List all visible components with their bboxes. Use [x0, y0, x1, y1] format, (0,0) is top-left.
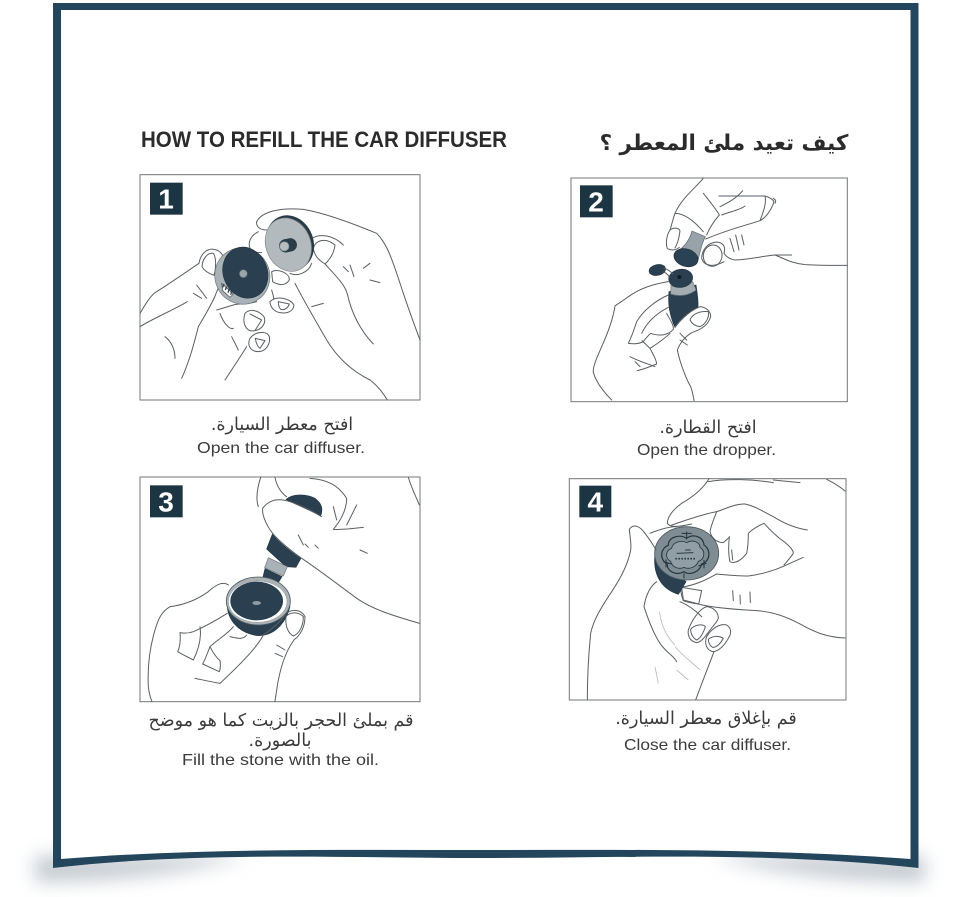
caption: step 3	[148, 711, 414, 769]
badge: number 1	[150, 183, 183, 215]
caption: step 2	[637, 418, 776, 459]
badge: number 2: 2	[588, 186, 604, 217]
caption: step 2: افتح القطارة.	[659, 418, 757, 438]
caption: step 4: Close the car diffuser.	[624, 737, 791, 754]
title: English heading: HOW TO REFILL THE CAR DIFFUSER	[141, 127, 507, 152]
icon: left hand	[140, 249, 294, 380]
panel: step 1 illustration	[140, 175, 420, 400]
icon: dropper bottle	[648, 263, 698, 327]
badge: number 2	[580, 185, 613, 217]
icon: dark diffuser base	[206, 239, 279, 313]
caption: step 4	[615, 709, 797, 754]
caption: step 1	[197, 415, 365, 457]
icon: diffuser cup	[226, 577, 290, 636]
badge: number 1: 1	[158, 184, 174, 215]
icon: closed diffuser with emblem	[655, 527, 719, 594]
caption: step 3: Fill the stone with the oil.	[182, 752, 379, 769]
badge: number 3: 3	[158, 486, 174, 517]
shadow under page corners	[35, 856, 925, 882]
icon: upper hand	[667, 479, 845, 638]
panel: step 4 illustration	[569, 479, 846, 700]
caption: step 2: Open the dropper.	[637, 442, 776, 459]
icon: lower hand	[593, 282, 711, 401]
icon: lower hand	[587, 526, 731, 700]
icon: grey lid with peg	[257, 208, 322, 278]
badge: number 4: 4	[588, 487, 604, 518]
title: Arabic heading: كيف تعيد ملئ المعطر ؟	[600, 131, 849, 156]
icon: upper hand with dropper	[257, 477, 419, 623]
caption: step 1: Open the car diffuser.	[197, 440, 365, 457]
badge: number 3	[150, 485, 183, 517]
icon: lower hand	[148, 583, 305, 702]
caption: step 3: بالصورة.	[249, 731, 311, 751]
panel: step 2 illustration	[571, 178, 847, 402]
icon: right hand holding the lid	[249, 209, 420, 400]
caption: step 3: قم بملئ الحجر بالزيت كما هو موضح	[148, 711, 414, 731]
icon: upper hand holding the cap	[666, 178, 847, 270]
panel: step 3 illustration	[140, 477, 420, 702]
caption: step 4: قم بإغلاق معطر السيارة.	[615, 709, 797, 729]
caption: step 1: افتح معطر السيارة.	[211, 415, 353, 435]
badge: number 4	[579, 486, 611, 518]
